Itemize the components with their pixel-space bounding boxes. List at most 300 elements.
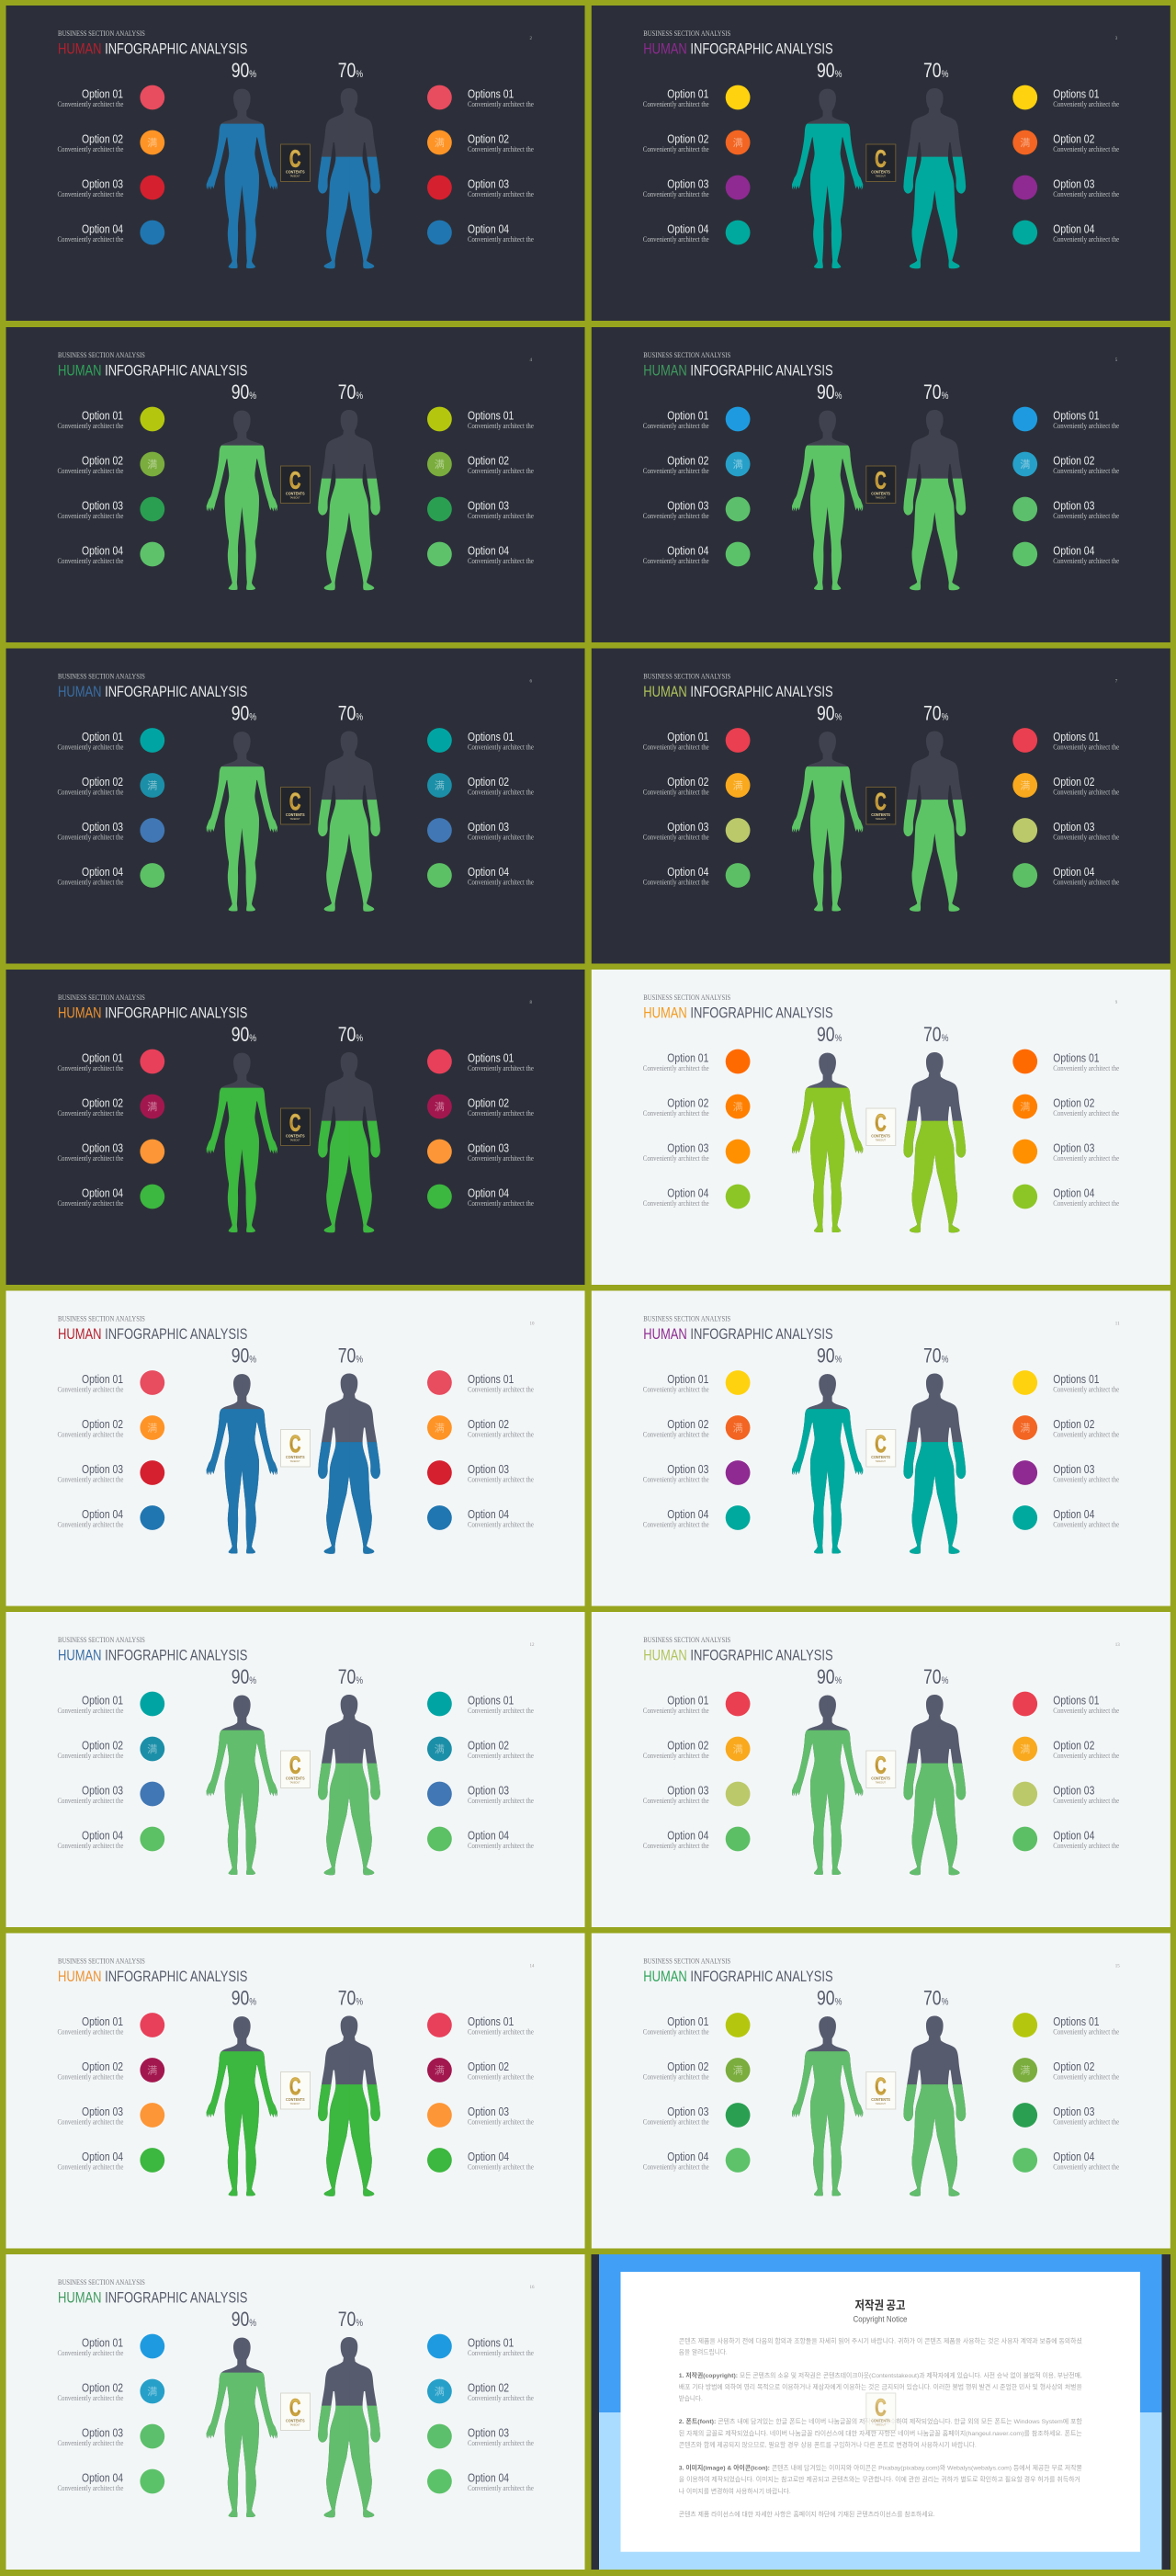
option right 1: Conveniently architect the	[1053, 1706, 1120, 1715]
percentages	[232, 381, 363, 404]
option left 2	[57, 1415, 164, 1440]
option left 1: Option 01	[82, 2015, 123, 2029]
percentages	[817, 703, 949, 725]
panel: slide 7 dark yellow-green	[592, 649, 1170, 963]
option left 2: 满	[733, 1742, 743, 1756]
option right 3	[1012, 818, 1120, 843]
option left 3	[643, 176, 750, 199]
option right 2: Option 02	[468, 1097, 509, 1110]
notice body: 콘텐츠와 함께 제공되지 않으므로, 필요할 경우 상용 폰트를 구입하거나 다른 폰트로 변경하여 사용하시기 바랍니다.	[679, 2441, 977, 2448]
notice title: Copyright Notice	[853, 2314, 908, 2325]
option right 1	[427, 1050, 535, 1073]
option right 4: Option 04	[468, 223, 509, 236]
option right 4: Option 04	[468, 2150, 509, 2164]
option left 4	[57, 2148, 164, 2173]
option left 3	[57, 1782, 164, 1806]
option left 2: Option 02	[82, 1740, 123, 1753]
option right 3: Option 03	[1053, 821, 1095, 834]
option left 4	[643, 221, 750, 244]
logo: C	[289, 1109, 300, 1136]
option left 3: Option 03	[82, 2105, 123, 2119]
logo	[281, 1108, 311, 1145]
logo	[281, 2071, 311, 2109]
option right 1	[427, 85, 535, 109]
percentages: 90%	[232, 1988, 256, 2010]
option left 3: Option 03	[667, 178, 709, 191]
option right 1: Options 01	[468, 1052, 514, 1065]
logo	[866, 144, 896, 182]
option left 1	[643, 2013, 750, 2037]
option left 1: Option 01	[82, 2337, 123, 2350]
option right 4: Option 04	[1053, 223, 1095, 236]
heading: 2	[529, 37, 533, 41]
heading: BUSINESS SECTION ANALYSIS	[643, 1314, 730, 1323]
option right 1	[427, 2013, 535, 2037]
option right 4	[427, 1185, 535, 1209]
option left 1: Conveniently architect the	[643, 743, 709, 752]
option right 2	[427, 131, 535, 154]
percentages	[232, 2309, 363, 2332]
option left 2: Option 02	[82, 133, 123, 146]
option left 1	[643, 85, 750, 109]
option right 4: Option 04	[468, 1187, 509, 1200]
option right 4: Conveniently architect the	[1053, 2162, 1120, 2172]
option left 1	[57, 407, 164, 431]
percentages: 70%	[923, 1988, 949, 2010]
logo	[281, 1430, 311, 1467]
option right 1	[427, 407, 535, 431]
percentages	[232, 1345, 363, 1367]
option right 4: Option 04	[468, 866, 509, 879]
option left 4	[57, 1185, 164, 1209]
option right 1: Options 01	[468, 2337, 514, 2350]
option left 1	[57, 85, 164, 109]
option left 4: Conveniently architect the	[643, 1520, 709, 1529]
logo: CONTENTS	[871, 1776, 890, 1781]
option right 2: 满	[1020, 1742, 1030, 1756]
percentages: 90%	[232, 60, 256, 83]
option left 1: Conveniently architect the	[58, 1385, 124, 1394]
option left 4	[643, 1827, 750, 1851]
option right 3	[427, 1460, 535, 1485]
option left 2	[57, 773, 164, 798]
option right 4: Conveniently architect the	[468, 878, 535, 887]
option left 4: Conveniently architect the	[58, 2483, 124, 2492]
panel: slide 12 light blue	[6, 1612, 584, 1927]
heading	[58, 2277, 535, 2307]
heading: HUMAN INFOGRAPHIC ANALYSIS	[58, 1005, 247, 1022]
heading: HUMAN INFOGRAPHIC ANALYSIS	[643, 41, 833, 58]
option left 2: 满	[733, 135, 743, 150]
percentages	[817, 1988, 949, 2010]
option right 4: Option 04	[1053, 2150, 1095, 2164]
option left 4: Conveniently architect the	[643, 556, 709, 565]
option left 4: Conveniently architect the	[58, 556, 124, 565]
heading: 15	[1115, 1965, 1120, 1969]
option left 4: Option 04	[82, 545, 123, 558]
option left 2: Conveniently architect the	[643, 788, 709, 797]
heading: BUSINESS SECTION ANALYSIS	[58, 672, 145, 681]
panel: slide 5 dark green blue dots	[592, 327, 1170, 642]
option right 2	[427, 773, 535, 798]
panel: slide 8 dark orange	[6, 970, 584, 1285]
logo: CONTENTS	[871, 1133, 890, 1139]
option left 4: Option 04	[82, 2472, 123, 2485]
option right 2: Conveniently architect the	[1053, 1751, 1120, 1760]
option left 1	[643, 728, 750, 753]
heading: HUMAN INFOGRAPHIC ANALYSIS	[58, 2290, 247, 2307]
option left 3: Option 03	[82, 500, 123, 513]
option right 3: Option 03	[468, 1463, 509, 1477]
option left 3: Conveniently architect the	[643, 1475, 709, 1484]
option left 3	[57, 2424, 164, 2448]
option left 4: Conveniently architect the	[58, 234, 124, 244]
option left 4	[57, 542, 164, 566]
figures	[792, 731, 966, 912]
option left 3: Conveniently architect the	[58, 1796, 124, 1805]
heading: 10	[529, 1322, 535, 1327]
percentages	[817, 1666, 949, 1689]
heading: 8	[529, 1001, 533, 1005]
option left 3	[643, 1140, 750, 1163]
option right 2: Conveniently architect the	[468, 788, 535, 797]
option left 4: Option 04	[82, 1187, 123, 1200]
heading: HUMAN INFOGRAPHIC ANALYSIS	[58, 685, 247, 700]
heading: BUSINESS SECTION ANALYSIS	[643, 1635, 730, 1644]
heading: BUSINESS SECTION ANALYSIS	[58, 2277, 145, 2287]
option left 2: Conveniently architect the	[58, 2393, 124, 2402]
option right 2	[1012, 1095, 1120, 1118]
percentages: 70%	[923, 1345, 949, 1367]
logo: TAKEOUT	[876, 2102, 886, 2105]
option left 1: Option 01	[667, 88, 708, 101]
option left 2: Conveniently architect the	[643, 1751, 709, 1760]
option right 1: Conveniently architect the	[1053, 99, 1120, 108]
option right 2	[1012, 131, 1120, 154]
option right 4	[427, 2469, 535, 2493]
option left 2: Conveniently architect the	[643, 1430, 709, 1439]
panel: slide 16 light green blue dots	[6, 2254, 584, 2570]
option left 2: 满	[147, 1421, 157, 1436]
option left 3: Conveniently architect the	[643, 1153, 709, 1163]
option right 4: Option 04	[1053, 1187, 1095, 1200]
logo	[281, 787, 311, 824]
option right 2: Option 02	[1053, 455, 1094, 468]
option left 4: Conveniently architect the	[58, 2162, 124, 2172]
heading: HUMAN INFOGRAPHIC ANALYSIS	[58, 363, 247, 380]
heading	[643, 1957, 1120, 1985]
option right 3: Option 03	[1053, 500, 1095, 513]
option right 3: Option 03	[468, 178, 509, 191]
logo: TAKEOUT	[876, 495, 886, 500]
heading: BUSINESS SECTION ANALYSIS	[58, 1635, 145, 1644]
percentages	[232, 1988, 363, 2010]
percentages: 70%	[923, 1024, 949, 1047]
option right 2	[1012, 452, 1120, 476]
option left 2: 满	[147, 777, 157, 792]
option left 2: Option 02	[667, 455, 708, 468]
option right 4	[1012, 221, 1120, 244]
option left 2	[57, 452, 164, 476]
option left 1: Option 01	[82, 731, 123, 744]
percentages: 90%	[232, 1024, 256, 1047]
logo: CONTENTS	[871, 2096, 890, 2102]
option right 2: Option 02	[468, 776, 509, 789]
option left 3: Conveniently architect the	[58, 2117, 124, 2127]
percentages: 70%	[338, 1345, 363, 1367]
option left 3	[57, 176, 164, 199]
notice body: 1. 저작권(copyright): 모든 콘텐츠의 소유 및 저작권은 콘텐츠테이크아웃(Contentstakeout)과 제작자에게 있습니다. 사전 승낙 없이 불법적 이용, 부난전매,	[679, 2371, 1082, 2379]
percentages: 90%	[817, 381, 842, 404]
option left 1: Conveniently architect the	[58, 99, 124, 108]
notice body: 나 이미지를 변경하여 사용하시기 바랍니다.	[679, 2487, 791, 2495]
option right 2: 满	[435, 1742, 445, 1756]
option right 4: Conveniently architect the	[468, 556, 535, 565]
option left 2: Conveniently architect the	[58, 144, 124, 153]
option right 3: Conveniently architect the	[1053, 1153, 1120, 1163]
option right 2: Conveniently architect the	[468, 144, 535, 153]
heading	[58, 350, 533, 380]
option right 1: Options 01	[468, 1373, 514, 1387]
option right 1	[1012, 407, 1120, 431]
option left 1	[57, 2334, 164, 2358]
option left 1: Option 01	[667, 1695, 708, 1708]
percentages: 90%	[232, 1666, 256, 1689]
option left 4: Conveniently architect the	[643, 2162, 709, 2172]
option right 4: Conveniently architect the	[468, 2162, 535, 2172]
heading: BUSINESS SECTION ANALYSIS	[643, 350, 730, 359]
option right 3: Conveniently architect the	[1053, 511, 1120, 520]
notice body	[679, 2336, 1082, 2518]
option left 4	[643, 1505, 750, 1530]
option left 3: Option 03	[667, 1142, 709, 1155]
option right 3: Option 03	[468, 1142, 509, 1155]
percentages: 90%	[817, 1024, 842, 1047]
logo: CONTENTS	[286, 169, 305, 175]
heading: HUMAN INFOGRAPHIC ANALYSIS	[643, 1005, 833, 1022]
option right 4: Conveniently architect the	[1053, 878, 1120, 887]
option left 2: 满	[147, 135, 157, 150]
logo: CONTENTS	[871, 811, 890, 817]
option right 2	[1012, 2058, 1120, 2082]
option left 2: 满	[733, 457, 743, 471]
option right 4	[1012, 1505, 1120, 1530]
logo	[281, 466, 311, 504]
logo: C	[875, 467, 887, 494]
panel: slide 14 light orange green	[6, 1934, 584, 2248]
option left 3	[57, 2103, 164, 2128]
option right 2: Conveniently architect the	[1053, 788, 1120, 797]
option left 2: Conveniently architect the	[58, 466, 124, 475]
logo: C	[875, 2072, 887, 2100]
option left 1	[57, 1692, 164, 1716]
option left 2: Option 02	[667, 1097, 708, 1110]
option right 3	[1012, 2103, 1120, 2128]
option left 4: Conveniently architect the	[58, 1841, 124, 1850]
option right 4	[427, 1827, 535, 1851]
option right 3: Conveniently architect the	[468, 511, 535, 520]
option right 2: 满	[1020, 135, 1030, 150]
option left 4: Option 04	[82, 1508, 123, 1522]
option right 2: 满	[435, 1421, 445, 1436]
option right 1: Conveniently architect the	[468, 1706, 535, 1715]
heading	[643, 1314, 1120, 1343]
option left 4: Option 04	[82, 223, 123, 236]
logo: CONTENTS	[286, 491, 305, 496]
option left 3: Conveniently architect the	[643, 1796, 709, 1805]
option left 2: Option 02	[667, 1740, 708, 1753]
logo: TAKEOUT	[290, 2423, 300, 2427]
option right 3: Option 03	[1053, 1785, 1095, 1798]
logo: TAKEOUT	[876, 1780, 886, 1785]
option right 4	[427, 221, 535, 244]
panel: slide 9 light orange	[592, 970, 1170, 1285]
option right 4	[427, 863, 535, 888]
percentages: 70%	[923, 60, 949, 83]
option left 2: Conveniently architect the	[58, 1751, 124, 1760]
percentages	[817, 1024, 949, 1047]
option left 2: 满	[733, 2062, 743, 2077]
option right 2: Conveniently architect the	[468, 466, 535, 475]
option right 3: Conveniently architect the	[468, 1475, 535, 1484]
option right 1	[427, 1692, 535, 1716]
option right 4: Conveniently architect the	[468, 2483, 535, 2492]
heading: BUSINESS SECTION ANALYSIS	[58, 1314, 145, 1323]
figures	[207, 1052, 380, 1232]
logo: C	[289, 2072, 300, 2100]
option right 3	[427, 1140, 535, 1163]
option left 2: Option 02	[82, 1097, 123, 1110]
option left 1: Option 01	[667, 1052, 708, 1065]
logo	[281, 2393, 311, 2430]
option right 1: Conveniently architect the	[468, 743, 535, 752]
option left 3	[643, 1782, 750, 1806]
option left 1	[57, 1050, 164, 1073]
option left 3: Conveniently architect the	[643, 833, 709, 842]
heading: HUMAN INFOGRAPHIC ANALYSIS	[643, 363, 833, 380]
logo	[281, 144, 311, 182]
option right 4: Option 04	[1053, 1830, 1095, 1843]
option right 2	[1012, 773, 1120, 798]
figures	[207, 1373, 380, 1554]
option left 1: Option 01	[82, 1373, 123, 1387]
percentages: 90%	[817, 1666, 842, 1689]
option left 3	[643, 818, 750, 843]
option left 2	[643, 773, 750, 798]
option right 1	[1012, 2013, 1120, 2037]
option left 2	[57, 2058, 164, 2082]
heading: BUSINESS SECTION ANALYSIS	[58, 993, 145, 1002]
option right 1: Options 01	[1053, 731, 1100, 744]
option right 3	[427, 2103, 535, 2128]
option left 4	[57, 1827, 164, 1851]
option right 3: Conveniently architect the	[468, 189, 535, 199]
option right 3: Option 03	[468, 500, 509, 513]
logo	[866, 1108, 896, 1145]
figures	[207, 410, 380, 590]
option left 3: Conveniently architect the	[58, 833, 124, 842]
option left 3	[57, 1140, 164, 1163]
option left 4	[643, 863, 750, 888]
option left 1: Option 01	[82, 410, 123, 423]
option right 3: Conveniently architect the	[1053, 1796, 1120, 1805]
option right 4: Option 04	[468, 1830, 509, 1843]
figures	[792, 2015, 966, 2196]
option left 2: Conveniently architect the	[643, 1108, 709, 1118]
option right 1: Options 01	[468, 1695, 514, 1708]
option right 2: Conveniently architect the	[468, 1108, 535, 1118]
option right 2	[1012, 1737, 1120, 1761]
option left 2: Option 02	[82, 776, 123, 789]
option left 4: Conveniently architect the	[58, 1520, 124, 1529]
option right 3	[1012, 176, 1120, 199]
option right 4: Conveniently architect the	[468, 1841, 535, 1850]
heading: 9	[1115, 1001, 1118, 1005]
option right 3: Option 03	[1053, 178, 1095, 191]
option right 4: Conveniently architect the	[468, 234, 535, 244]
logo: CONTENTS	[286, 2096, 305, 2102]
option left 1	[57, 2013, 164, 2037]
heading: 6	[529, 680, 533, 684]
percentages: 70%	[338, 60, 363, 83]
option left 3: Conveniently architect the	[58, 1153, 124, 1163]
option left 1	[57, 1370, 164, 1395]
option left 4: Option 04	[82, 2150, 123, 2164]
option left 3: Conveniently architect the	[643, 511, 709, 520]
option left 1	[643, 1692, 750, 1716]
option left 1: Conveniently architect the	[643, 1706, 709, 1715]
option left 3: Conveniently architect the	[58, 1475, 124, 1484]
option right 2	[427, 2058, 535, 2082]
logo: CONTENTS	[871, 491, 890, 496]
figures	[207, 2015, 380, 2196]
option left 2: Option 02	[82, 1418, 123, 1432]
option right 2: Conveniently architect the	[468, 1430, 535, 1439]
option left 2: Option 02	[667, 1418, 708, 1432]
logo: C	[875, 2394, 887, 2421]
notice body: 배포 기타 방법에 의하여 영리 목적으로 이용하거나 제삼자에게 이용하는 것은 금지되어 있습니다. 이러한 불법 행위 발견 시 준엄한 민사 및 형사상의 처벌을	[679, 2382, 1082, 2391]
panel: slide 6 dark blue	[6, 649, 584, 963]
panel: slide 15 light green	[592, 1934, 1170, 2248]
option left 2	[57, 2379, 164, 2403]
heading: HUMAN INFOGRAPHIC ANALYSIS	[643, 1648, 833, 1664]
option left 2: 满	[147, 2062, 157, 2077]
logo: C	[289, 2394, 300, 2421]
option left 1: Option 01	[667, 731, 708, 744]
option right 1: Options 01	[1053, 1695, 1100, 1708]
option right 3	[1012, 1460, 1120, 1485]
option left 2: 满	[147, 1099, 157, 1114]
option right 2: Option 02	[1053, 776, 1094, 789]
heading: 5	[1115, 358, 1118, 363]
option left 2: Conveniently architect the	[643, 144, 709, 153]
option right 1	[1012, 728, 1120, 753]
option right 1	[1012, 1692, 1120, 1716]
option right 2	[1012, 1415, 1120, 1440]
option right 2	[427, 1095, 535, 1118]
notice title: 저작권 공고	[854, 2296, 906, 2313]
option right 1: Options 01	[468, 410, 514, 423]
percentages	[232, 1024, 363, 1047]
option right 4: Option 04	[1053, 866, 1095, 879]
option left 1: Option 01	[82, 1052, 123, 1065]
option right 2: Conveniently architect the	[1053, 1108, 1120, 1118]
option right 1	[1012, 85, 1120, 109]
option right 1: Conveniently architect the	[468, 99, 535, 108]
heading: BUSINESS SECTION ANALYSIS	[58, 350, 145, 359]
heading: HUMAN INFOGRAPHIC ANALYSIS	[58, 41, 247, 58]
option left 1: Option 01	[82, 88, 123, 101]
